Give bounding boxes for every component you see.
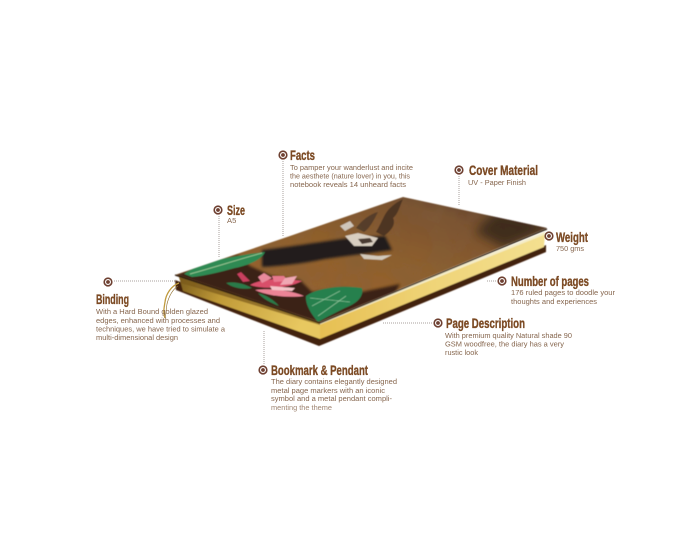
callout: Number of pages: [498, 273, 615, 306]
page block left edge: [179, 277, 320, 339]
small leaves by lotus: [226, 282, 252, 289]
callout: Number of pages: 176 ruled pages to doodle your: [511, 288, 615, 297]
infographic canvas: [96, 150, 615, 412]
callout: Bookmark & Pendant: menting the theme: [271, 403, 332, 412]
callout: Bookmark & Pendant: metal page markers with an iconic: [271, 386, 385, 395]
callout: Cover Material: Cover Material: [469, 162, 538, 178]
callout: Facts: To pamper your wanderlust and incite: [290, 163, 413, 172]
callout: Size: [214, 202, 245, 225]
callout: Page Description: GSM woodfree, the diary has a very: [445, 340, 564, 348]
callout: Binding: [96, 278, 226, 342]
callout: Number of pages: thoughts and experiences: [511, 297, 597, 306]
callout: Size: A5: [227, 216, 236, 225]
callout: Page Description: With premium quality Natural shade 90: [445, 331, 572, 340]
front cover: [175, 197, 547, 322]
light strip on top of pages: [320, 232, 545, 324]
callout: Weight: 750 gms: [556, 244, 584, 253]
cover edge: [175, 229, 547, 323]
dark foliage background: [175, 255, 400, 323]
callout: Facts: [279, 147, 413, 189]
callout: Bookmark & Pendant: Bookmark & Pendant: [271, 362, 368, 378]
deer head markings: [340, 199, 403, 260]
callout: Page Description: Page Description: [446, 315, 525, 331]
callout: Page Description: [434, 315, 572, 357]
dark corner shading: [475, 212, 550, 248]
shadow on left pages: [179, 277, 320, 325]
lotus flower: [237, 272, 304, 297]
callout: Cover Material: [455, 162, 538, 187]
notebook illustration: [170, 195, 550, 346]
connector lines: [114, 161, 496, 364]
callout: Binding: multi-dimensional design: [96, 333, 178, 342]
mottled leather texture: [198, 206, 486, 314]
callout: Size: Size: [227, 202, 245, 218]
callout: Binding: Binding: [96, 291, 129, 307]
green leaf left: [184, 252, 265, 277]
callout: Page Description: rustic look: [445, 348, 478, 357]
callout: Weight: Weight: [556, 229, 588, 245]
callout: Binding: With a Hard Bound golden glazed: [96, 307, 208, 316]
callout: Facts: the aesthete (nature lover) in you, this: [290, 172, 410, 180]
page block right edge: [320, 232, 545, 339]
callout: Facts: notebook reveals 14 unheard facts: [290, 180, 406, 189]
callout: Bookmark & Pendant: symbol and a metal pendant compli-: [271, 394, 392, 403]
callout: Weight: [545, 229, 588, 253]
callout: Bookmark & Pendant: The diary contains elegantly designed: [271, 377, 397, 386]
callout: Cover Material: UV - Paper Finish: [468, 178, 526, 187]
green leaf right: [306, 287, 362, 322]
cover artwork: [170, 195, 550, 325]
callout: Binding: edges, enhanced with processes and: [96, 316, 220, 325]
callout: Facts: Facts: [290, 147, 315, 163]
back cover: [175, 245, 546, 346]
callout: Number of pages: Number of pages: [511, 273, 589, 289]
bookmark pendant: [164, 283, 179, 318]
callout: Binding: techniques, we have tried to simulate a: [96, 324, 226, 334]
callout: Bookmark & Pendant: [259, 362, 397, 412]
deer neck: [262, 236, 392, 267]
